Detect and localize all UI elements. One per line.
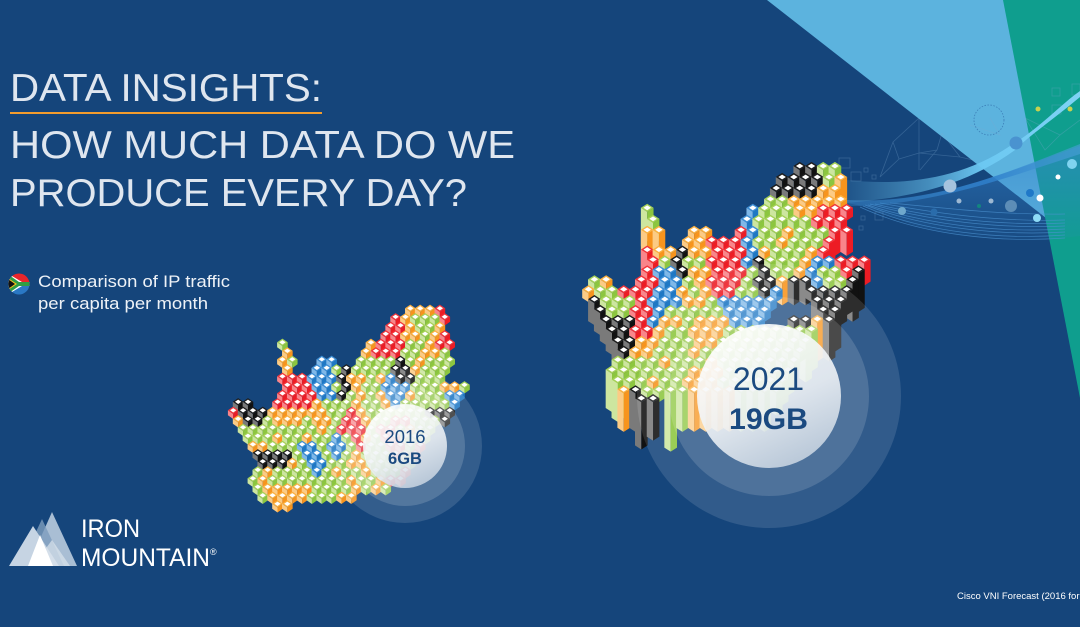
map: 2016 cubes bbox=[228, 305, 470, 512]
title: line 3: PRODUCE EVERY DAY? bbox=[10, 172, 467, 215]
disc: 2016 bbox=[363, 404, 447, 488]
value: 19GB: 19GB bbox=[729, 403, 808, 436]
halo: 2016 bbox=[328, 369, 482, 523]
network lines and wave graphic bbox=[839, 84, 1080, 239]
title: line 2: HOW MUCH DATA DO WE bbox=[10, 124, 515, 167]
halo: 2021 bbox=[637, 264, 901, 528]
subtitle text: per capita per month bbox=[38, 294, 208, 313]
logo: iron mountain bbox=[9, 512, 217, 572]
logo wordmark: MOUNTAIN bbox=[81, 544, 210, 572]
registered mark: ® bbox=[210, 547, 217, 557]
title: data insights: DATA INSIGHTS: bbox=[10, 67, 322, 110]
light blue triangle bbox=[767, 0, 1046, 218]
value: 6GB: 6GB bbox=[388, 450, 422, 468]
map: 2021 cubes bbox=[582, 162, 871, 452]
logo mountains bbox=[9, 512, 77, 566]
teal wedge bbox=[1003, 0, 1080, 398]
source note: Cisco VNI Forecast (2016 for bbox=[957, 591, 1080, 602]
icon: south africa flag bbox=[8, 273, 30, 295]
subtitle text: Comparison of IP traffic bbox=[38, 272, 231, 291]
disc: 2021 bbox=[697, 324, 841, 468]
label: 2016: 2016 bbox=[384, 426, 426, 447]
label: 2021: 2021 bbox=[733, 361, 804, 397]
title underline bbox=[10, 112, 322, 114]
logo wordmark: IRON bbox=[81, 515, 140, 543]
